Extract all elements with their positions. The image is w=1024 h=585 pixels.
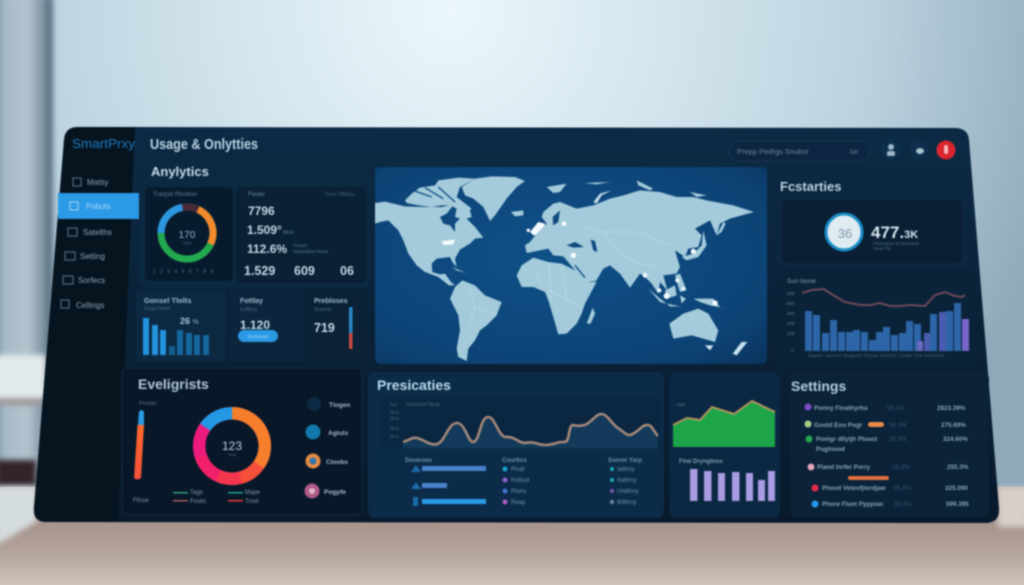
heading: Eveligrists [138, 376, 209, 392]
area chart [673, 401, 775, 447]
Greenland [462, 176, 525, 221]
South America [450, 280, 502, 361]
shelf edge [0, 398, 42, 405]
Borneo [665, 285, 677, 299]
icon list: Pogpfe [324, 489, 346, 496]
pale table highlight left [0, 487, 36, 545]
panel: map [375, 167, 767, 364]
heading: Anylytics [151, 164, 209, 179]
list: countries: Pollout [511, 478, 530, 484]
Eurasia [525, 190, 754, 294]
line chart: Sor [390, 402, 398, 407]
bars [805, 303, 969, 351]
Philippines [675, 274, 687, 292]
icon: cloud [910, 141, 928, 159]
list: countries [502, 458, 530, 506]
Tasmania [705, 345, 713, 350]
vertical bar [134, 410, 144, 480]
stat card [782, 200, 962, 263]
curtain at left [0, 0, 54, 490]
Hudson Bay [440, 206, 460, 232]
x labels: Sapen Janoon Seppoth Route Sunthy Linale Cld Anenoah [808, 353, 945, 358]
panel: right stat [306, 290, 366, 362]
line chart: 10.0 [390, 434, 399, 439]
panel: middle stat: Fottlay [240, 298, 263, 305]
panel: presicaties [368, 372, 664, 518]
search box [729, 141, 870, 161]
pill [238, 330, 278, 342]
search box: Prepp Pedrgs Snubst [737, 147, 809, 156]
rows: 33.3% [889, 436, 907, 443]
heading: Presicaties [377, 377, 451, 393]
donut [152, 198, 222, 268]
nav labels: Setting [80, 252, 105, 261]
nav labels: Sorfecs [78, 276, 105, 285]
rows: 55.3% [893, 485, 911, 492]
stats card: 609 [294, 264, 315, 278]
active nav item [58, 193, 139, 219]
world map: Eurasia and Oceania [525, 180, 754, 355]
axis labels: 200 [787, 331, 795, 336]
axis labels: 400 [787, 321, 795, 326]
screen body [34, 127, 999, 523]
list: sources: Biltlhny [617, 500, 636, 506]
list: countries: Phall [511, 467, 524, 473]
stats card: 1.529 [244, 264, 275, 278]
nav labels: Pobuts [86, 202, 111, 211]
nav labels: Satelths [83, 228, 112, 237]
rows: Pland Inrfer Porry [817, 464, 871, 471]
donut card: Traspat Pbodser [153, 192, 197, 198]
icon: user [881, 140, 901, 160]
line chart: 20.0 [390, 416, 399, 421]
rows: 26.3% [892, 464, 910, 471]
nav labels [76, 178, 112, 310]
axis labels: 900 [787, 291, 795, 296]
Borders [468, 262, 582, 324]
list: devices [405, 458, 486, 506]
list: sources [608, 458, 642, 506]
Black Sea [567, 242, 584, 248]
list: countries: Courltos [502, 458, 527, 464]
stat card: Phaloplost thi dounend [873, 241, 919, 246]
Asian borders [580, 227, 670, 267]
rows: 59.3% [887, 405, 905, 412]
panel: eveligrists [122, 368, 362, 515]
panel: bar card: Gonsel Tlolts [144, 296, 192, 305]
panel: settings [790, 372, 989, 518]
panel: area and bars [669, 372, 780, 518]
panel: middle stat [229, 290, 305, 362]
rows: 55.3% [889, 422, 907, 429]
panel: analytics [140, 164, 370, 288]
rows: Ponlgr dllytjh Ptoast [816, 436, 878, 443]
North America [375, 202, 483, 285]
vertical meter [349, 307, 352, 337]
icon: alert [936, 140, 956, 160]
panel: middle stat: Download [248, 334, 269, 339]
panel: middle stat: Softlyss [240, 307, 258, 313]
list: sources: Italthny [617, 478, 636, 484]
heading: Settings [791, 378, 846, 394]
logo: SmartPrxy [72, 136, 136, 151]
panel: bar card: 26 % [180, 316, 200, 326]
panel: right stat: 719 [314, 321, 335, 335]
line chart: Tlaoensal Nosp [405, 402, 440, 408]
list: devices: Deveroes [405, 458, 433, 464]
stats card: Shperithem Rreal [293, 249, 328, 254]
line chart [380, 398, 660, 448]
stats card: 1.509° [247, 223, 282, 237]
stats card: 7796 [248, 204, 275, 218]
gauge [826, 214, 862, 250]
Australia [669, 309, 718, 342]
search box: tar [850, 149, 859, 156]
donut card: 1 2 3 4 5 6 7 8 9 [153, 269, 215, 275]
donut card: Uses [182, 240, 192, 245]
Sulawesi [680, 295, 686, 304]
Iceland [511, 210, 523, 216]
heading: Fcstarties [780, 179, 841, 194]
stats card [236, 187, 366, 283]
list: sources: Unitlhny [617, 489, 639, 495]
axis labels: 600 [787, 311, 795, 316]
line chart: 15.0 [390, 426, 399, 431]
rows: 275.69% [941, 422, 966, 429]
Arctic islands [405, 178, 475, 214]
rows: Phovd Votesfjlordjaw [822, 485, 886, 492]
list: sources: Ialthny [617, 467, 635, 473]
rows: 255.3% [947, 464, 969, 471]
Madagascar [587, 308, 595, 324]
list: sources: Sonrer Yarp [608, 458, 642, 464]
legend items: Trool [245, 499, 258, 505]
stat card: Sinat Tlit [873, 246, 891, 251]
trend line [802, 289, 965, 306]
sidebar [34, 127, 139, 522]
stats card: Thaant [293, 243, 308, 248]
Hotspots [442, 222, 575, 257]
panel: right stat: Soaerts [314, 307, 332, 313]
rows: 55.3% [894, 501, 912, 508]
Cuba [452, 267, 467, 273]
rows: 324.60% [943, 436, 968, 443]
panel: eveligrists: 123 [222, 439, 242, 453]
stat card: 477.3K [871, 223, 918, 242]
axis labels [787, 291, 795, 353]
rows: Phore Fluot Pyppiao [822, 501, 883, 508]
line chart: 30.0 [390, 410, 399, 415]
table surface [0, 487, 1024, 585]
New Zealand [733, 342, 747, 355]
stats card: 112.6% [247, 242, 287, 256]
nav labels: Cellings [76, 301, 104, 310]
stats card: Dooe MBHou [325, 192, 355, 198]
panel: bar card [136, 290, 226, 362]
panel: combo chart [780, 270, 976, 367]
Hotspots [562, 221, 718, 306]
legend items: Mape [245, 490, 261, 496]
stats card: 06 [340, 264, 354, 278]
rows: 2823.39% [937, 405, 966, 412]
dashboard screen [34, 127, 999, 523]
panel: combo chart: Sun rlaoue [787, 279, 817, 285]
Sakhalin [717, 222, 726, 235]
pale table highlight right [998, 487, 1024, 527]
donut card: 170 [179, 230, 196, 241]
Baltic [553, 210, 560, 225]
gauge: 36 [838, 226, 852, 241]
header title: Usage & Onlytties [150, 137, 258, 153]
white shelf at left [0, 355, 46, 398]
dark object at left [0, 460, 36, 486]
area chart: Hart [677, 402, 686, 407]
legend items: Fostis [190, 499, 206, 505]
axis labels: 800 [787, 301, 795, 306]
legend items: Tage [190, 490, 204, 496]
bar heading: Fine Dryngtoss [679, 459, 723, 465]
Svalbard [547, 184, 567, 193]
panel: bar card: Soapl hours [144, 306, 171, 312]
list: countries: Reap [511, 500, 526, 506]
Caspian [591, 240, 597, 252]
icon list: Tlogen [329, 402, 350, 409]
panel: middle stat: 1.120 [240, 318, 270, 332]
panel: eveligrists: Total [228, 452, 236, 457]
panel: eveligrists: Prnotin [139, 401, 156, 407]
world map: Americas and Africa [375, 176, 597, 361]
icon list: Cloobs [326, 459, 348, 466]
nav icons [61, 178, 81, 308]
panel: right stat: Prebloses [314, 298, 348, 305]
icon list: Agtuls [328, 430, 349, 437]
donut [186, 400, 278, 492]
rows: Puglnood [816, 446, 845, 453]
axis labels: 0 [791, 348, 794, 353]
New Guinea [693, 299, 728, 309]
legend items: Fllsse [133, 498, 149, 504]
Java [667, 304, 681, 306]
panel: features [775, 170, 968, 266]
Arctic Russia islands [593, 190, 612, 204]
icon list [304, 397, 350, 498]
rows: Gootd Eoo Pogr [814, 422, 863, 429]
stats card: Pases [248, 192, 265, 198]
rows [804, 404, 969, 508]
rows: Poriny Finathyrha [814, 405, 868, 412]
legend items [133, 490, 261, 505]
Japan [682, 230, 707, 260]
donut card [145, 187, 233, 281]
nav labels: Mattiy [87, 178, 108, 187]
Sumatra [648, 289, 667, 304]
orange indicators [868, 422, 884, 427]
rows: 599.395 [946, 501, 969, 508]
stats card: Most [283, 230, 294, 236]
Red Sea [575, 265, 585, 278]
Africa [517, 258, 597, 334]
bars [143, 318, 209, 355]
list: countries: Plurts [511, 489, 526, 495]
purple bars [690, 469, 775, 501]
rows: 325.090 [945, 485, 968, 492]
